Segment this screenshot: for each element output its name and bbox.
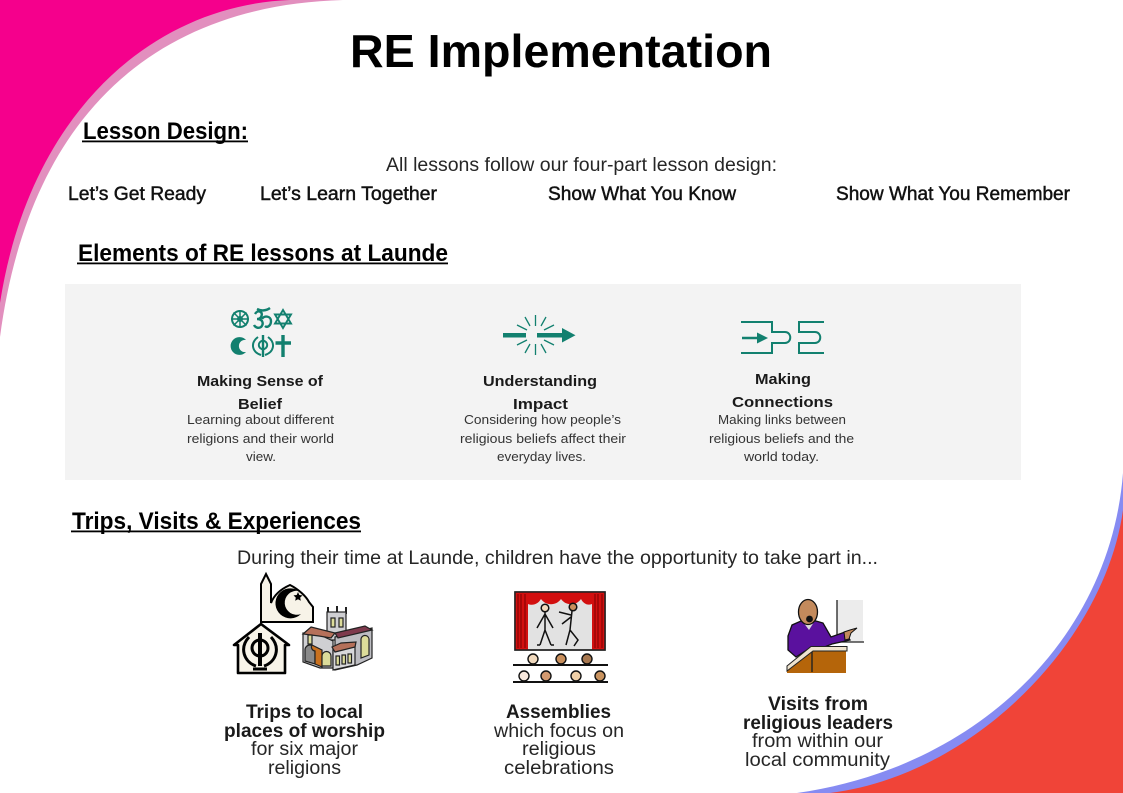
caption: trips to places of worship: religions: [268, 758, 341, 779]
lesson part 3: Show What You Know: [548, 184, 736, 205]
element description: Making links: world today.: [743, 449, 819, 464]
khanda: [253, 335, 273, 357]
om: [254, 308, 271, 328]
church: [303, 606, 372, 670]
caption: visits from religious leaders: local community: [745, 750, 891, 771]
heading: Elements of RE lessons: Elements of RE lessons at Launde: [78, 240, 448, 267]
element description: Considering: religious beliefs affect their: [460, 431, 627, 446]
caption: trips to places of worship: places of worship: [224, 721, 385, 742]
element title: Making Sense of Belief: Making Sense of: [197, 373, 324, 390]
caption: trips to places of worship: for six major: [251, 739, 359, 760]
title: RE Implementation: [350, 25, 772, 77]
caption: visits from religious leaders: [743, 694, 893, 771]
icon: impact arrow burst: [503, 315, 576, 355]
element description: Considering: [460, 412, 627, 464]
mosque: [261, 574, 313, 622]
caption: visits from religious leaders: religious leaders: [743, 713, 893, 734]
caption: assemblies: celebrations: [504, 758, 614, 779]
caption: assemblies: [493, 702, 624, 779]
element description: Making links: [709, 412, 854, 464]
element title: Making Connections: Connections: [732, 394, 833, 411]
caption: assemblies: which focus on: [493, 721, 624, 742]
panel: elements of RE lessons: [65, 284, 1021, 480]
element title: Making Connections: [732, 371, 833, 411]
decoration: top-left hot pink swoosh: [0, 0, 290, 303]
element title: Understanding Impact: Impact: [513, 396, 568, 413]
dharma wheel: [231, 310, 249, 328]
element title: Making Sense of Belief: Belief: [238, 396, 283, 413]
element title: Making Connections: Making: [755, 371, 811, 388]
text: trips intro: During their time at Launde, children have the opportunity to take part in...: [237, 548, 878, 569]
decoration: bottom-right periwinkle swoosh: [797, 473, 1123, 793]
icon: religious symbols: [231, 308, 291, 357]
gurdwara: [234, 624, 289, 673]
icon: assembly stage: [513, 592, 608, 682]
crescent: [231, 338, 245, 354]
element title: Making Sense of Belief: [197, 373, 324, 413]
decoration: top-left pale pink swoosh: [0, 0, 343, 337]
lesson part 4: Show What You Remember: [836, 184, 1071, 205]
star of David: [275, 310, 291, 328]
element description: Considering: everyday lives.: [497, 449, 586, 464]
element description: Learning about: Learning about different: [187, 412, 334, 427]
caption: trips to places of worship: Trips to local: [246, 702, 363, 723]
element description: Making links: religious beliefs and the: [709, 431, 854, 446]
element title: Understanding Impact: Understanding: [483, 373, 597, 390]
lesson part 2: Let’s Learn Together: [260, 184, 438, 205]
element title: Understanding Impact: [483, 373, 597, 413]
cross: [276, 335, 291, 357]
caption: visits from religious leaders: from within our: [752, 731, 884, 752]
lesson part 1: Let’s Get Ready: [68, 184, 206, 205]
element description: Making links: Making links between: [718, 412, 846, 427]
decoration: bottom-right red swoosh: [830, 510, 1123, 793]
icon: places of worship: [234, 574, 372, 673]
caption: trips to places of worship: [224, 702, 385, 779]
caption: assemblies: Assemblies: [506, 702, 611, 723]
heading: Trips, Visits and Experiences: Trips, Visits & Experiences: [72, 508, 361, 535]
text: four-part lesson intro: All lessons follow our four-part lesson design:: [386, 155, 777, 176]
caption: assemblies: religious: [522, 739, 596, 760]
lesson parts row: [68, 184, 1071, 205]
element description: Learning about: religions and their world: [187, 431, 334, 446]
icon: religious leader speaking: [787, 600, 864, 673]
icon: connections: [741, 322, 824, 353]
heading: Lesson Design: Lesson Design:: [83, 118, 248, 145]
element description: Learning about: [187, 412, 334, 464]
caption: visits from religious leaders: Visits from: [768, 694, 868, 715]
element description: Considering: Considering how people’s: [464, 412, 622, 427]
element description: Learning about: view.: [246, 449, 276, 464]
